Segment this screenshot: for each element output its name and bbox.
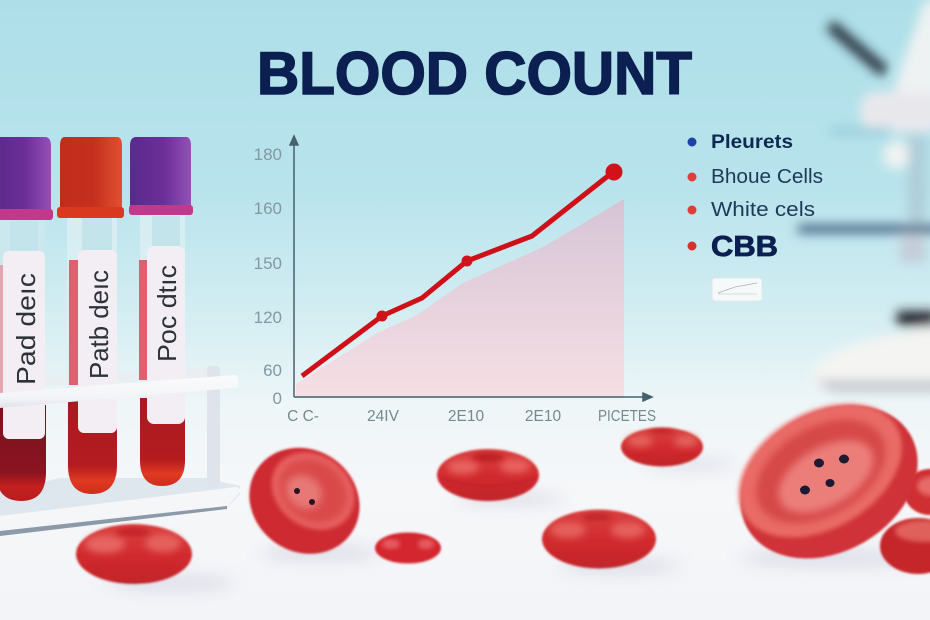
- rim: [715, 376, 925, 565]
- y axis: [290, 136, 298, 397]
- large red blood cell with four holes: [712, 372, 930, 589]
- cell holes: [800, 454, 849, 494]
- mini chart thumbnail: [712, 278, 762, 301]
- pink plasma: [139, 260, 148, 380]
- red blood cell: lower center: [542, 510, 656, 568]
- trend line: [302, 172, 613, 376]
- blurred microscope: [798, 0, 930, 392]
- label: [147, 246, 185, 424]
- test tube 3: [129, 137, 193, 486]
- line chart: [254, 136, 656, 425]
- y axis labels: 0: [273, 389, 282, 408]
- legend item: Pleurets: Pleurets: [711, 132, 793, 153]
- dish: [738, 398, 903, 545]
- label: [3, 251, 45, 439]
- test tube rack: [0, 366, 238, 488]
- x axis labels: 24IV: [367, 408, 400, 425]
- dish: [116, 527, 150, 537]
- y axis labels: 150: [254, 254, 282, 273]
- test tube 1: [0, 137, 53, 501]
- chart area fill: [296, 199, 624, 397]
- red blood cell: center: [437, 449, 539, 501]
- legend: [688, 132, 823, 301]
- glass inner highlight: [82, 218, 112, 252]
- legend item: White cels: White cels: [711, 199, 815, 221]
- rack base: [0, 478, 240, 536]
- title: BLOOD COUNT: [257, 40, 692, 107]
- legend item: Bhoue Cells: Bhoue Cells: [711, 166, 823, 188]
- test tube rack back rail: [0, 368, 212, 388]
- label text: Poc dtıc: [152, 265, 182, 362]
- x axis labels: [287, 408, 656, 425]
- red blood cell: tilted with two holes: [228, 426, 380, 575]
- cell dish: [268, 447, 358, 535]
- label: [78, 250, 117, 433]
- pink plasma: [0, 265, 4, 395]
- red blood cell: right edge upper: [904, 469, 930, 515]
- blood: [140, 398, 185, 486]
- x axis labels: 2E10: [525, 408, 561, 425]
- cell holes: [294, 488, 315, 505]
- x axis labels: PICETES: [598, 408, 656, 425]
- glass inner highlight: [10, 220, 38, 252]
- rack post: [207, 366, 220, 488]
- rack upper rail: [0, 375, 238, 408]
- cell shadows: [105, 460, 920, 590]
- y axis labels: 120: [254, 308, 282, 327]
- red blood cell: right edge lower: [880, 518, 930, 574]
- glass: [140, 212, 185, 472]
- x axis: [294, 393, 652, 401]
- top rim highlight: [85, 535, 125, 553]
- red blood cell: small: [375, 532, 441, 564]
- data points: [376, 164, 622, 322]
- y axis labels: 180: [254, 145, 282, 164]
- legend item: CBB: [688, 231, 778, 263]
- purple cap: [0, 137, 53, 220]
- purple cap: [129, 137, 193, 215]
- glass: [67, 215, 117, 475]
- y axis labels: 160: [254, 199, 282, 218]
- test tube 2: [57, 137, 124, 494]
- red blood cell: left bottom: [76, 524, 192, 584]
- y axis labels: [254, 145, 282, 408]
- blood: [68, 400, 117, 494]
- blood: [0, 405, 46, 501]
- red cap: [57, 137, 124, 218]
- x axis labels: C C-: [287, 408, 319, 425]
- glass inner highlight: [152, 216, 180, 246]
- glass: [0, 215, 45, 495]
- legend item: CBB: CBB: [711, 231, 778, 263]
- red blood cell: back right: [621, 428, 703, 466]
- label text: Patb deıc: [84, 270, 114, 379]
- cell rim: [256, 436, 370, 546]
- y axis labels: 60: [263, 361, 282, 380]
- x axis labels: 2E10: [448, 408, 484, 425]
- pink plasma: [69, 260, 79, 385]
- label text: Pad deıc: [11, 273, 41, 385]
